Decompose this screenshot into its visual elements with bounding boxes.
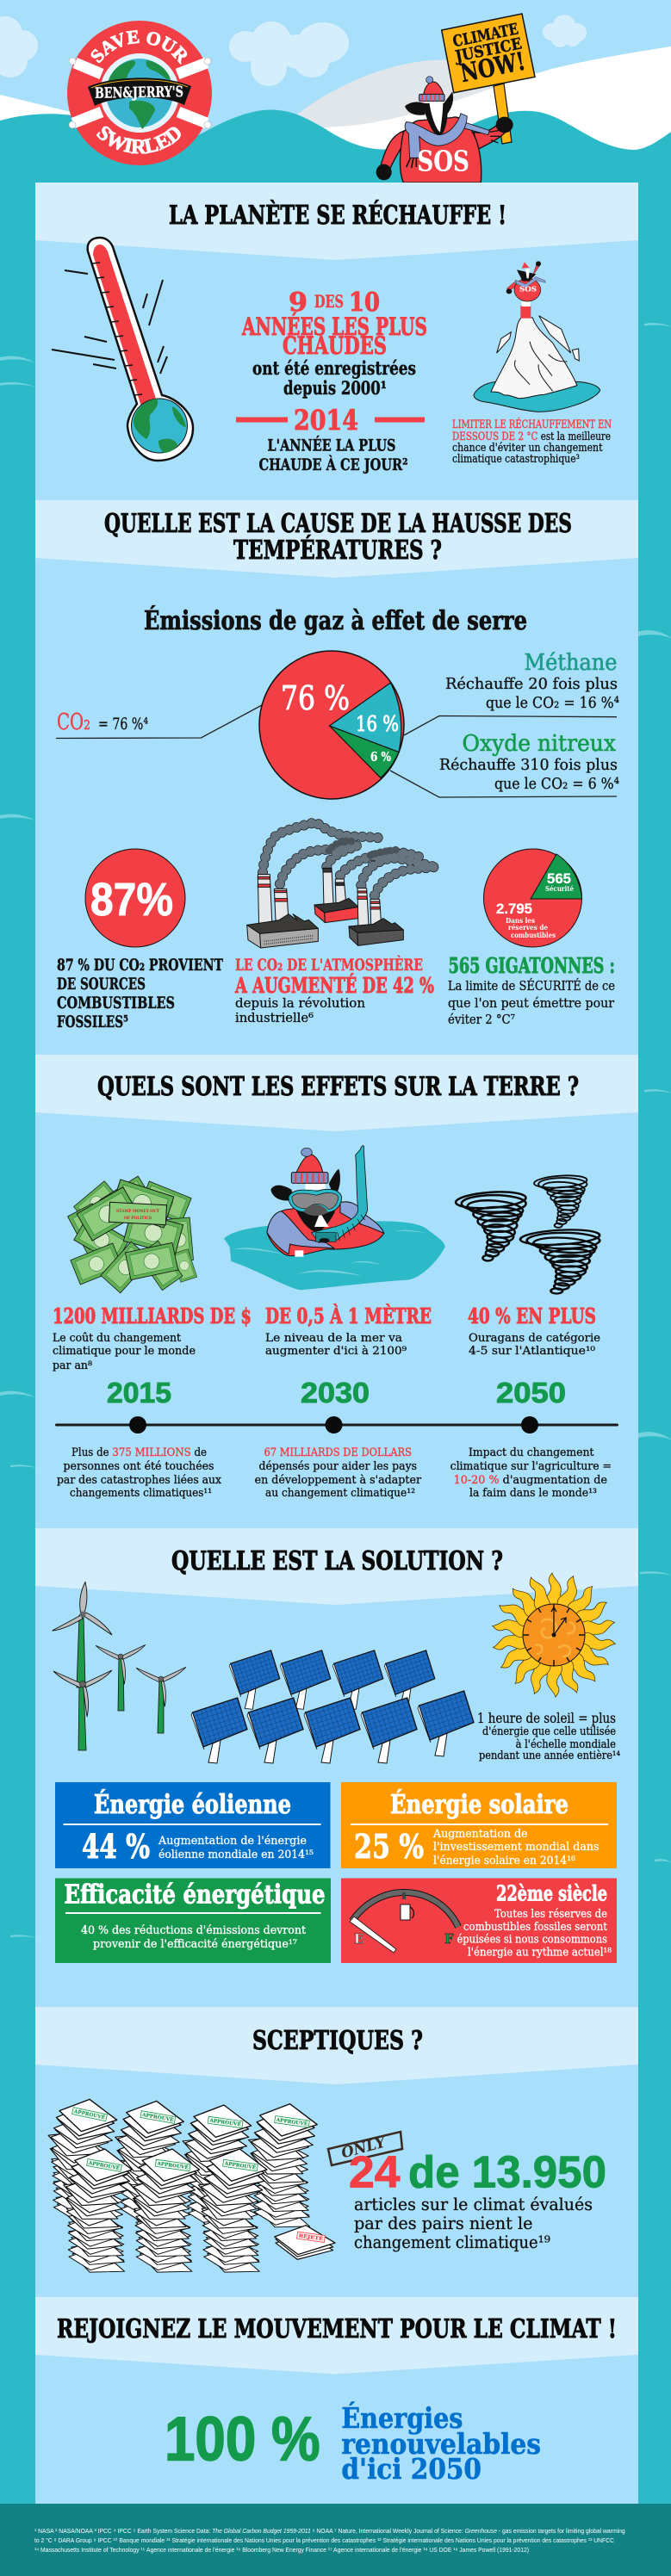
panel: fossil fuel depletion xyxy=(341,1879,617,1963)
footer: sources xyxy=(0,2504,671,2576)
stat: 100 percent renewable: d'ici 2050 xyxy=(341,2452,482,2486)
heading: la solution: QUELLE EST LA SOLUTION ? xyxy=(171,1546,503,1576)
stat: 100 percent renewable: Énergies xyxy=(341,2400,463,2435)
grey factory xyxy=(247,875,318,948)
callout: methane xyxy=(404,650,619,735)
text: one hour of sun: d'énergie que celle utilisée xyxy=(482,1725,616,1738)
stat: sea level xyxy=(265,1303,432,1358)
approved stamps: APPROUVÉ xyxy=(208,2116,242,2128)
stat: hurricanes: 40 % EN PLUS xyxy=(468,1303,596,1328)
pie chart: carbon budget: 565 xyxy=(547,870,571,887)
callout: methane: Méthane xyxy=(524,650,617,676)
panel: solar energy: l'énergie solaire en 2014¹⁶ xyxy=(433,1855,575,1867)
panel: energy efficiency xyxy=(55,1879,331,1963)
logo: save our swirled xyxy=(67,21,212,165)
text: fossil sources: FOSSILES⁵ xyxy=(57,1012,128,1031)
text: fossil sources xyxy=(57,956,223,1031)
pie chart: greenhouse gases: 76 % xyxy=(281,679,350,717)
stat: 2014: CHAUDE À CE JOUR² xyxy=(258,455,408,474)
rejected paper: REJETÉ xyxy=(298,2232,325,2242)
callout: co2: = 76 %⁴ xyxy=(98,715,148,734)
icon: pile of money: OF POLITICS xyxy=(124,1216,152,1221)
panel: fossil fuel depletion: épuisées si nous consommons xyxy=(457,1934,607,1947)
approved stamps: APPROUVÉ xyxy=(87,2159,121,2171)
dark factory xyxy=(349,889,403,945)
timeline xyxy=(55,1377,618,1434)
callout: nitrous oxide: que le CO₂ = 6 %⁴ xyxy=(494,775,619,793)
text: 2030: au changement climatique¹² xyxy=(265,1487,415,1500)
pie chart: carbon budget: combustibles xyxy=(511,931,556,939)
heading: sceptiques: SCEPTIQUES ? xyxy=(252,2026,423,2056)
clouds xyxy=(0,15,587,86)
stat: hurricanes xyxy=(468,1303,600,1358)
stat: hottest years: depuis 2000¹ xyxy=(283,377,387,399)
cow figure: SOS xyxy=(417,144,469,177)
panel: solar energy: Augmentation de xyxy=(432,1828,528,1841)
stat: hottest years: 10 xyxy=(349,288,380,318)
text: one hour of sun: à l'échelle mondiale xyxy=(516,1738,616,1751)
stat: 2014 xyxy=(236,404,425,474)
stat: 24 of 13950: changement climatique¹⁹ xyxy=(354,2232,550,2252)
timeline: 2050 xyxy=(496,1377,566,1409)
water xyxy=(224,1221,445,1290)
panel: solar energy: l'investissement mondial dans xyxy=(433,1841,600,1854)
callout: methane: Réchauffe 20 fois plus xyxy=(445,675,618,693)
thermometer xyxy=(52,238,193,461)
pie chart: carbon budget: Sécurité xyxy=(545,884,574,893)
timeline: 2015 xyxy=(107,1377,171,1409)
stat: hottest years: DES xyxy=(314,291,344,312)
timeline: 2030 xyxy=(301,1377,370,1409)
stat: 24 of 13950: de 13.950 xyxy=(408,2147,606,2197)
heading: la planete se rechauffe xyxy=(35,183,638,260)
approved stamps xyxy=(72,2108,309,2171)
text: 565 gigatonnes: éviter 2 °C⁷ xyxy=(448,1012,515,1027)
stat: sea level: Le niveau de la mer va xyxy=(265,1332,402,1345)
heading: la solution xyxy=(35,1528,638,1605)
icon: sun clock xyxy=(491,1573,617,1697)
stat: cost of climate change: 1200 MILLIARDS DE $ xyxy=(53,1303,252,1328)
icon: wind turbines xyxy=(53,1582,186,1750)
stamp: only: ONLY xyxy=(339,2133,388,2162)
icon: stacks of papers xyxy=(45,2099,335,2279)
circle: 87 percent: 87% xyxy=(90,874,173,926)
placard: CLIMATE xyxy=(451,20,520,51)
cow on iceberg: SOS xyxy=(519,285,537,294)
icon: fuel gauge xyxy=(350,1892,458,1953)
panel: fossil fuel depletion: l'énergie au rythme actuel¹⁸ xyxy=(468,1946,612,1960)
factories with smoke xyxy=(247,822,434,948)
circle: 87 percent xyxy=(85,849,185,947)
callout: methane: que le CO₂ = 16 %⁴ xyxy=(486,694,619,712)
icon: snorkelling cow in water xyxy=(224,1146,445,1290)
text: one hour of sun: pendant une année entière¹⁴ xyxy=(479,1749,620,1762)
text: co2 increase: A AUGMENTÉ DE 42 % xyxy=(234,973,434,998)
heading: rejoignez le mouvement xyxy=(35,2297,638,2375)
pie chart: carbon budget: Dans les xyxy=(506,916,535,925)
panel: energy efficiency: Efficacité énergétique xyxy=(64,1880,326,1910)
callout: co2 xyxy=(56,705,262,739)
iceberg caption xyxy=(452,418,612,466)
panel: wind energy: Augmentation de l'énergie xyxy=(158,1835,307,1848)
lifebuoy ring xyxy=(84,37,196,149)
iceberg caption: LIMITER LE RÉCHAUFFEMENT EN xyxy=(452,418,612,431)
text: co2 increase: industrielle⁶ xyxy=(235,1010,314,1025)
placard xyxy=(442,14,535,93)
text: 565 gigatonnes xyxy=(448,953,615,1027)
text: 2050: climatique sur l'agriculture = xyxy=(450,1460,612,1473)
text: 2030: en développement à s'adapter xyxy=(255,1474,422,1487)
ben and jerry's banner: BEN&JERRY'S xyxy=(95,84,183,102)
text: fossil sources: DE SOURCES xyxy=(57,975,146,994)
stamp: only xyxy=(328,2132,402,2165)
placard: NOW! xyxy=(457,46,528,88)
pie chart: greenhouse gases: 6 % xyxy=(370,749,391,765)
text: 2015: Plus de 375 MILLIONS de xyxy=(71,1446,207,1459)
approved stamps: APPROUVÉ xyxy=(141,2111,175,2123)
text: 2050: 10-20 % d'augmentation de xyxy=(454,1474,607,1487)
text: 565 gigatonnes: La limite de SÉCURITÉ de ce xyxy=(448,978,615,994)
footer: sources: ¹ NASA ² NASA/NOAA ³ IPCC ⁴ IPCC ⁵ Earth System Science Data: The Global Carbon Budget 1959-2011 ⁶ NOAA ⁷ Nature, International Weekly Journal of Science: Greenhouse - gas emission targets for limiting global warming xyxy=(34,2527,625,2535)
stat: hottest years: ANNÉES LES PLUS xyxy=(241,313,427,341)
stat: 24 of 13950 xyxy=(349,2147,606,2252)
stat: hurricanes: 4-5 sur l'Atlantique¹⁰ xyxy=(469,1345,595,1358)
iceberg caption: chance d'éviter un changement xyxy=(452,442,603,455)
heading: la planete se rechauffe: LA PLANÈTE SE RÉCHAUFFE ! xyxy=(169,200,506,231)
panel: wind energy: Énergie éolienne xyxy=(94,1789,291,1820)
pie chart: carbon budget: 2.795 xyxy=(496,901,532,917)
stat: 24 of 13950: par des pairs nient le xyxy=(354,2213,532,2233)
ben and jerry's banner xyxy=(88,77,191,106)
pie chart: carbon budget xyxy=(484,849,582,947)
panel: wind energy: 44 % xyxy=(82,1827,150,1866)
stat: cost of climate change: climatique pour le monde xyxy=(53,1345,196,1358)
iceberg caption: DESSOUS DE 2 °C est la meilleure xyxy=(452,430,611,443)
text: fossil sources: COMBUSTIBLES xyxy=(57,994,175,1012)
panel: fossil fuel depletion: combustibles fossiles seront xyxy=(463,1921,608,1934)
stat: sea level: augmenter d'ici à 2100⁹ xyxy=(265,1345,407,1358)
text: 2050: Impact du changement xyxy=(469,1446,594,1459)
heading: effets sur la terre xyxy=(35,1055,638,1131)
icon: pile of money xyxy=(68,1176,197,1293)
stat: 100 percent renewable: 100 % xyxy=(165,2406,320,2474)
icon: fuel gauge: E xyxy=(354,1931,363,1947)
callout: nitrous oxide: Réchauffe 310 fois plus xyxy=(439,756,618,774)
stat: 24 of 13950: 24 xyxy=(349,2147,401,2197)
smoke xyxy=(263,822,434,895)
panel: solar energy: Énergie solaire xyxy=(390,1789,568,1820)
callout: co2: CO₂ xyxy=(57,709,90,735)
text: fossil sources: 87 % DU CO₂ PROVIENT xyxy=(57,956,223,975)
icon: pile of money: STAMP MONEY OUT xyxy=(116,1209,159,1214)
stat: hottest years xyxy=(241,288,427,399)
callout: nitrous oxide: Oxyde nitreux xyxy=(462,731,616,757)
stat: hurricanes: Ouragans de catégorie xyxy=(469,1332,600,1345)
panel: solar energy: 25 % xyxy=(354,1827,424,1866)
stat: hottest years: 9 xyxy=(289,288,308,318)
heading: cause de la hausse xyxy=(35,500,638,578)
approved stamps: APPROUVÉ xyxy=(156,2159,189,2171)
panel: fossil fuel depletion: 22ème siècle xyxy=(496,1881,607,1906)
stat: cost of climate change: Le coût du changement xyxy=(53,1332,182,1345)
text: 2015: personnes ont été touchées xyxy=(64,1460,214,1473)
placard pole xyxy=(494,84,512,144)
footer: sources: to 2 °C ⁸ DARA Group ⁹ IPCC ¹⁰ Banque mondiale ¹¹ Stratégie internationale des Nations Unies pour la prévention des catastrophes ¹² Stratégie internationale des Nations Unies pour la prévention des catastrophes ¹³ UNFCC xyxy=(34,2536,614,2544)
red factory xyxy=(314,868,358,923)
text: one hour of sun: 1 heure de soleil = plus xyxy=(477,1710,616,1726)
save our text: SAVE OUR xyxy=(91,29,188,65)
stat: sea level: DE 0,5 À 1 MÈTRE xyxy=(265,1303,432,1328)
icon: tornadoes xyxy=(455,1174,600,1293)
panel: solar energy xyxy=(341,1782,617,1868)
panel: fossil fuel depletion: Toutes les réserves de xyxy=(494,1908,607,1921)
icon: fuel gauge: F xyxy=(444,1931,454,1947)
stat: 2014: L'ANNÉE LA PLUS xyxy=(267,436,396,455)
text: 565 gigatonnes: 565 GIGATONNES : xyxy=(449,953,615,978)
footer: sources: ¹⁴ Massachusetts Institute of Technology ¹⁵ Agence internationale de l'énergie ¹⁶ Bloomberg New Energy Finance ¹⁷ Agence internationale de l'énergie ¹⁸ US DOE ¹⁹ James Powell (1991-2012) xyxy=(34,2546,529,2554)
text: co2 increase: LE CO₂ DE L'ATMOSPHÈRE xyxy=(235,955,423,975)
diver xyxy=(267,1202,384,1256)
stat: cost of climate change: par an⁸ xyxy=(53,1359,92,1372)
heading: cause de la hausse: TEMPÉRATURES ? xyxy=(233,535,442,566)
swirled text: SWIRLED xyxy=(96,126,181,154)
approved stamps: APPROUVÉ xyxy=(223,2159,257,2171)
iceberg caption: climatique catastrophique³ xyxy=(452,453,580,466)
globe xyxy=(106,59,173,129)
text: 2030: 67 MILLIARDS DE DOLLARS xyxy=(264,1446,412,1459)
text: one hour of sun xyxy=(477,1710,620,1762)
text: 2030: dépensés pour aider les pays xyxy=(258,1460,417,1473)
rejected paper xyxy=(274,2225,335,2259)
stat: 100 percent renewable: renouvelables xyxy=(341,2427,541,2461)
cow on iceberg xyxy=(474,261,600,412)
stat: hottest years: ont été enregistrées xyxy=(252,357,416,379)
snowy hills xyxy=(0,46,671,164)
stat: cost of climate change xyxy=(53,1303,252,1372)
text: 2015: changements climatiques¹¹ xyxy=(70,1487,212,1500)
cow mascot with placard xyxy=(376,14,535,183)
panel: wind energy xyxy=(55,1782,331,1868)
heading: sceptiques xyxy=(35,2007,638,2084)
text: 565 gigatonnes: que l'on peut émettre pour xyxy=(448,995,615,1011)
approved stamps: APPROUVÉ xyxy=(72,2108,106,2121)
text: co2 increase xyxy=(234,955,434,1025)
text: co2 increase: depuis la révolution xyxy=(235,995,365,1011)
callout: nitrous oxide xyxy=(390,731,619,797)
text: 2050: la faim dans le monde¹³ xyxy=(469,1487,597,1500)
rope bands xyxy=(73,63,207,123)
stat: hottest years: CHAUDES xyxy=(283,331,387,360)
stat: 100 percent renewable xyxy=(165,2400,541,2486)
panel: energy efficiency: provenir de l'efficacité énergétique¹⁷ xyxy=(93,1938,297,1951)
pie chart: carbon budget: réserves de xyxy=(508,923,548,932)
text: 2015 xyxy=(57,1446,222,1500)
text: 2015: par des catastrophes liées aux xyxy=(57,1474,222,1487)
pie chart: greenhouse gases xyxy=(259,651,404,799)
icon: solar panels xyxy=(191,1650,474,1763)
approved stamps: APPROUVÉ xyxy=(275,2116,308,2127)
pie chart: greenhouse gases: 16 % xyxy=(356,712,399,736)
stat: 24 of 13950: articles sur le climat évalués xyxy=(354,2194,593,2214)
cow figure xyxy=(376,77,513,183)
side wave streaks xyxy=(0,323,671,1938)
text: 2050 xyxy=(450,1446,612,1500)
panel: wind energy: éolienne mondiale en 2014¹⁵ xyxy=(158,1848,314,1861)
panel: energy efficiency: 40 % des réductions d'émissions devront xyxy=(81,1924,307,1937)
subheading: emissions: Émissions de gaz à effet de serre xyxy=(144,605,527,636)
stat: 2014: 2014 xyxy=(294,404,358,437)
placard: JUSTICE xyxy=(452,34,524,66)
text: 2030 xyxy=(255,1446,422,1500)
